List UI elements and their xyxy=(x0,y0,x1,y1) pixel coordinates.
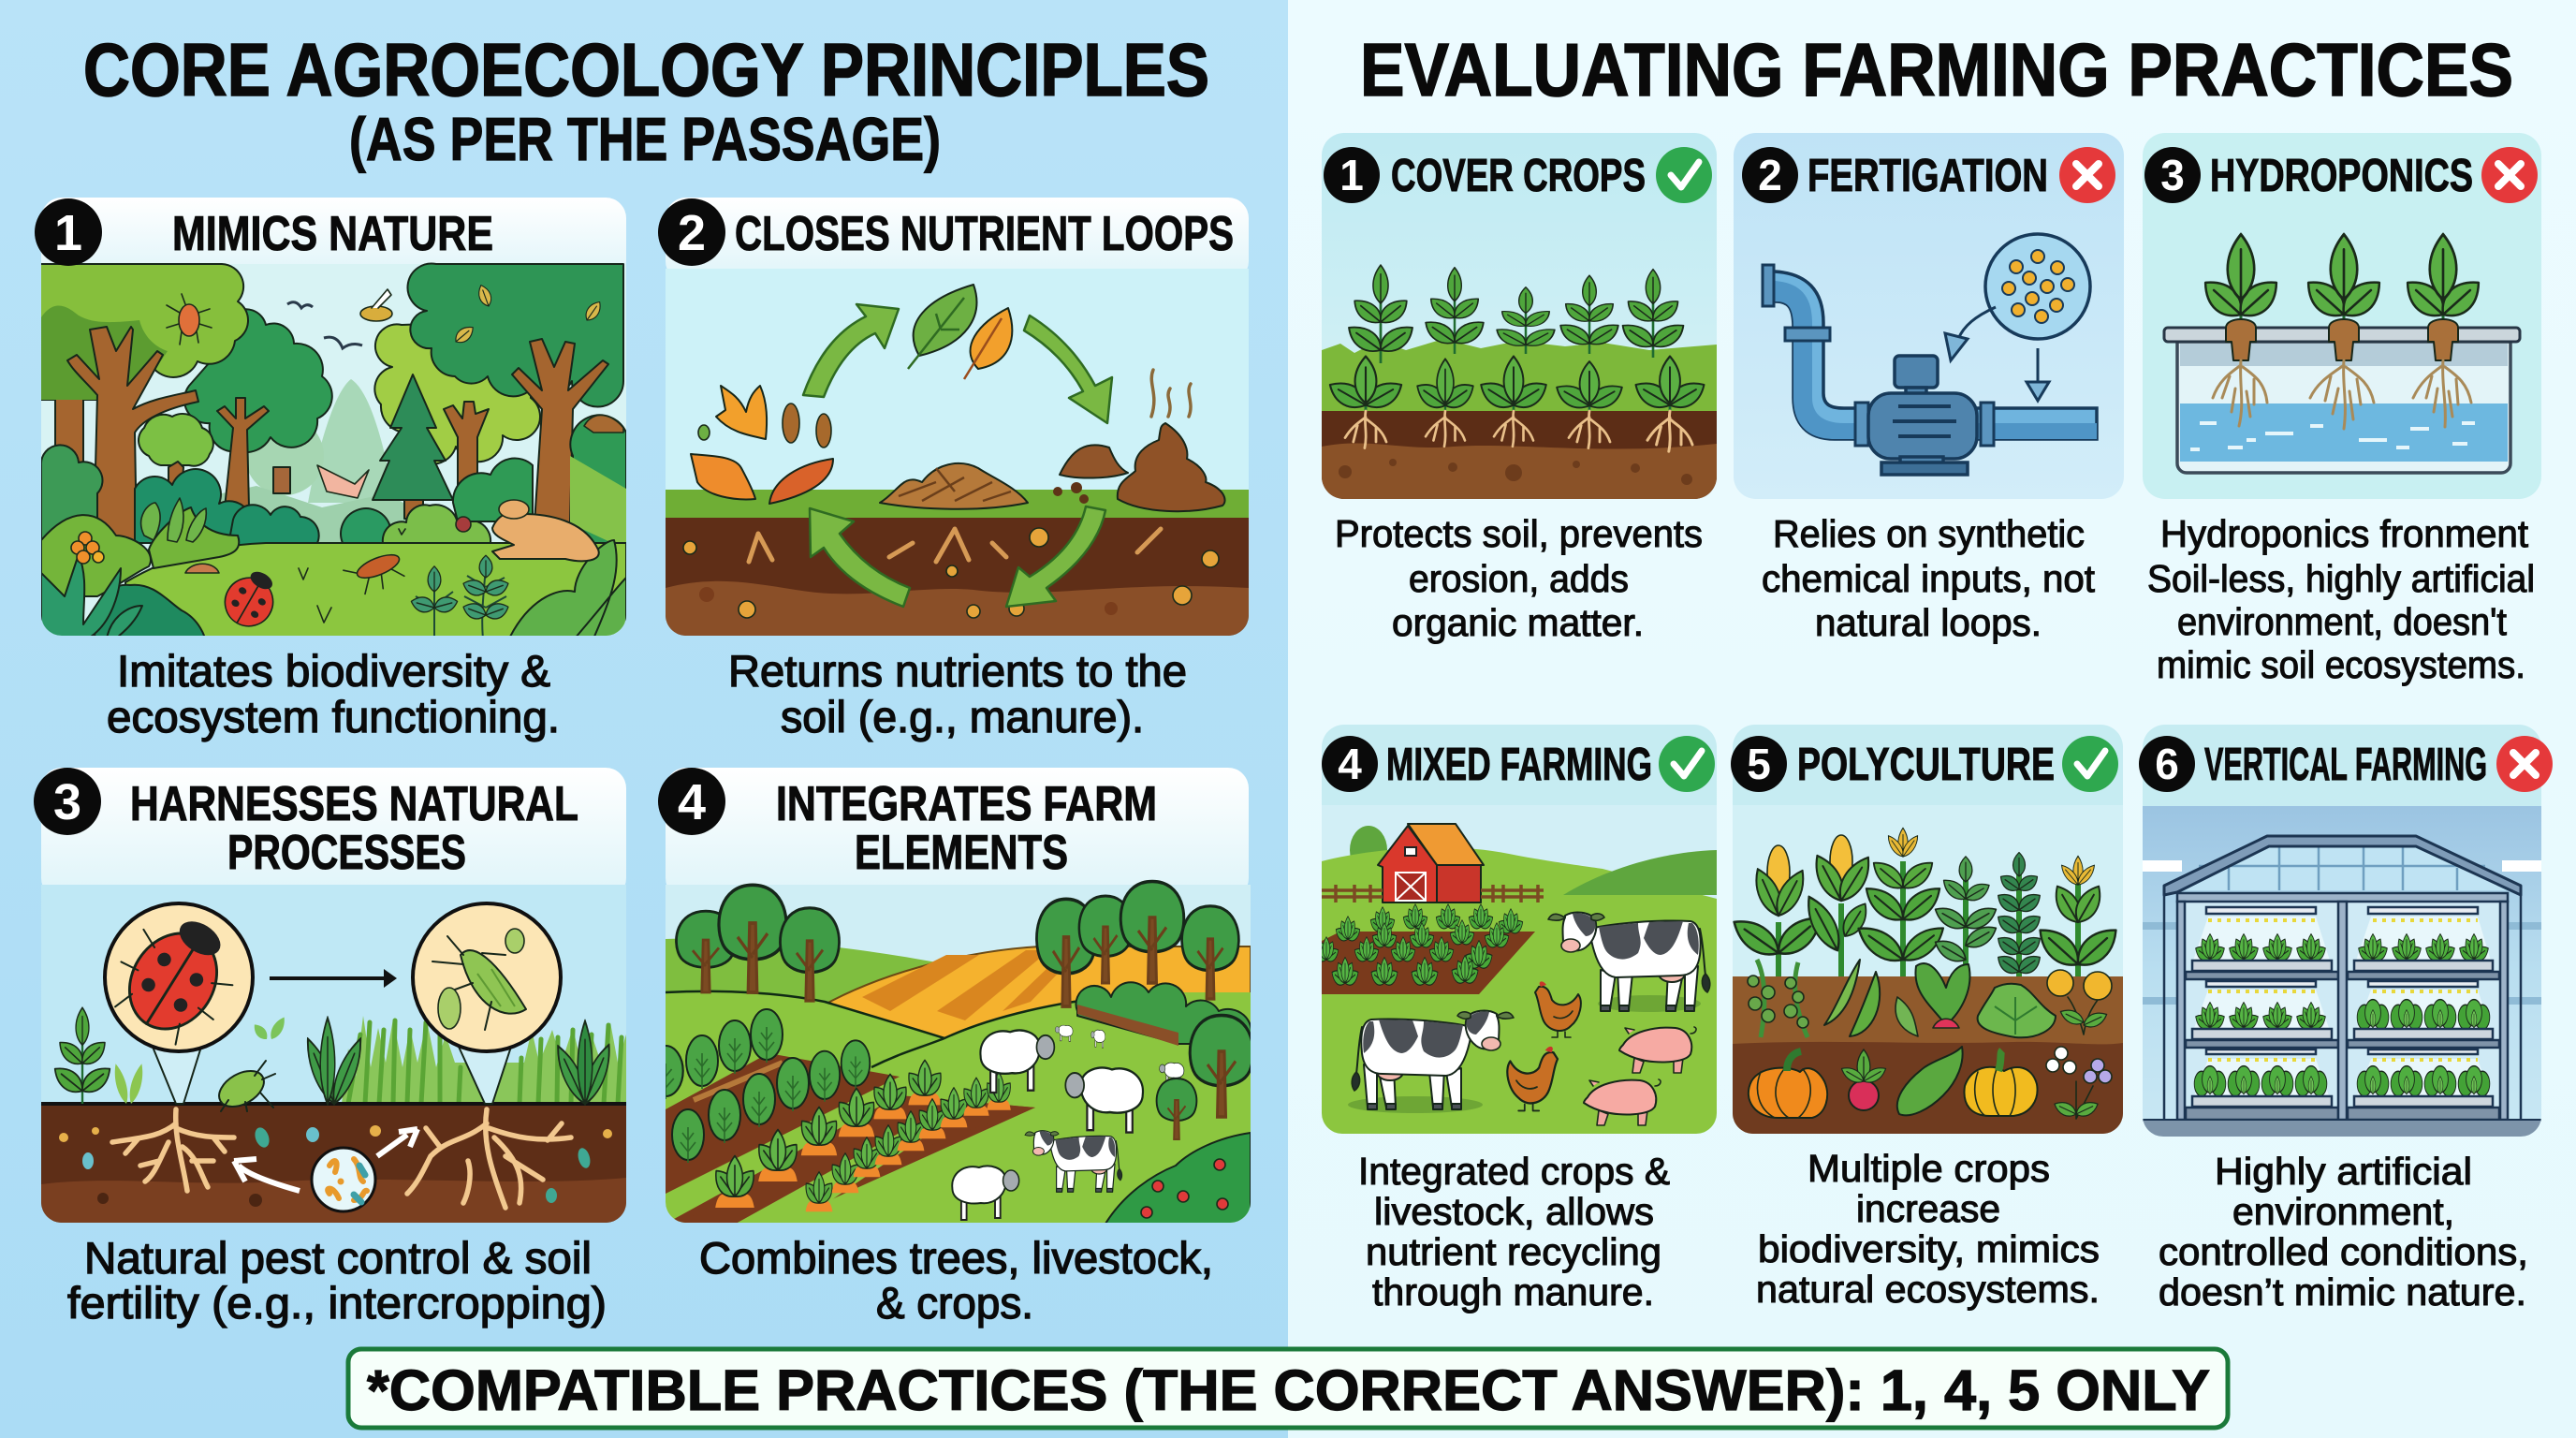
panel: principle 3 harnesses natural processes xyxy=(34,768,626,1223)
caption: hydroponics: Soil-less, highly artificial xyxy=(2147,557,2535,600)
illustration: polyculture garden xyxy=(1727,805,2124,1135)
badge: number 4: 4 xyxy=(1338,740,1362,788)
panel: practice 4 mixed farming xyxy=(1312,725,1717,1135)
orchard rows xyxy=(648,1009,870,1163)
hedge xyxy=(1076,982,1251,1044)
icon: beetle on canopy xyxy=(167,294,212,345)
icon: soil microbes xyxy=(312,1148,375,1211)
icon: red cross xyxy=(2059,147,2115,203)
icon: green and orange leaves xyxy=(908,285,1012,379)
caption: principle 1: ecosystem functioning. xyxy=(107,692,560,741)
caption: fertigation: natural loops. xyxy=(1815,601,2042,644)
root vegetables and gourds xyxy=(1749,1047,2112,1120)
icon: red barn xyxy=(1378,824,1484,902)
caption: principle 2: Returns nutrients to the xyxy=(728,646,1187,696)
grow lights xyxy=(2206,907,2478,1054)
icon: green check xyxy=(1656,147,1712,203)
mid-level vegetables xyxy=(1748,960,2112,1037)
caption: fertigation: Relies on synthetic xyxy=(1773,512,2085,555)
plants with roots xyxy=(2197,234,2487,429)
heading: closes nutrient loops: CLOSES NUTRIENT LOOPS xyxy=(735,207,1234,261)
badge: number 5 xyxy=(1731,736,1787,792)
caption: principle 4: & crops. xyxy=(876,1278,1033,1328)
pipework xyxy=(1763,265,2097,446)
front row plants xyxy=(1325,357,1710,414)
plants xyxy=(50,1007,616,1108)
badge: number 2: 2 xyxy=(678,205,706,261)
right background panel xyxy=(1288,0,2576,1438)
heading: harnesses natural processes xyxy=(130,777,578,880)
icon: aphid on ground xyxy=(212,1061,275,1114)
arrow: nutrients to pump xyxy=(1945,307,1996,360)
icon: green check xyxy=(1659,736,1715,792)
icon: red cross xyxy=(2481,147,2538,203)
vegetable rows xyxy=(710,1060,1014,1211)
soil nutrients and roots xyxy=(683,528,1219,618)
livestock xyxy=(952,1025,1184,1220)
panel: practice 1 cover crops xyxy=(1322,133,1717,499)
badge: number 2: 2 xyxy=(1758,151,1782,199)
arrows: microbes to roots xyxy=(234,1129,417,1191)
arrow: predator to pest xyxy=(270,969,397,988)
frame interior xyxy=(2177,892,2508,1120)
panel: practice 5 polyculture xyxy=(1727,725,2124,1135)
caption: polyculture xyxy=(1756,1147,2100,1311)
caption: principle 2 xyxy=(728,646,1187,741)
illustration: forest ecosystem xyxy=(37,264,626,643)
badge: number 1: 1 xyxy=(54,205,82,261)
caption: mixed farming: livestock, allows xyxy=(1374,1190,1654,1233)
caption: principle 1 xyxy=(107,646,560,741)
badge: number 1 xyxy=(35,198,102,266)
tall crops xyxy=(1727,828,2124,977)
title: core agroecology principles xyxy=(83,28,1209,173)
heading: hydroponics: HYDROPONICS xyxy=(2210,151,2473,201)
caption: fertigation: chemical inputs, not xyxy=(1762,557,2096,600)
badge: number 3 xyxy=(34,768,101,835)
badge: number 6: 6 xyxy=(2155,740,2179,788)
arrow: down to manure xyxy=(1024,315,1112,423)
leafy plants xyxy=(2193,934,2491,1096)
icon: red cross xyxy=(2496,736,2553,792)
heading: fertigation: FERTIGATION xyxy=(1808,151,2048,201)
caption: principle 3: fertility (e.g., intercropping) xyxy=(67,1278,607,1328)
badge: number 3: 3 xyxy=(2160,151,2185,199)
panel: principle 4 integrates farm elements xyxy=(648,768,1253,1224)
badge: number 5: 5 xyxy=(1747,740,1771,788)
vegetable plot xyxy=(1322,932,1535,994)
big left tree xyxy=(37,264,248,540)
caption: cover crops: erosion, adds xyxy=(1409,557,1629,600)
badge: number 1: 1 xyxy=(1339,151,1364,199)
fence xyxy=(1322,885,1544,902)
icon: ground insect xyxy=(343,554,405,595)
caption: principle 1: Imitates biodiversity & xyxy=(117,646,550,696)
icon: magnifier with aphid xyxy=(413,903,561,1104)
caption: cover crops: Protects soil, prevents xyxy=(1335,512,1703,555)
trays and shelves xyxy=(2164,893,2521,1120)
glass roof xyxy=(2177,845,2508,890)
caption: hydroponics: Hydroponics fronment xyxy=(2160,512,2529,555)
caption: vertical farming: Highly artificial xyxy=(2215,1150,2472,1193)
icon: magnifier with ladybird xyxy=(99,898,254,1104)
back row plants xyxy=(1342,265,1690,363)
tall grass xyxy=(342,1016,626,1104)
panel: practice 6 vertical farming xyxy=(2139,725,2553,1138)
left background panel xyxy=(0,0,1288,1438)
illustration: nutrient cycle xyxy=(666,269,1249,636)
caption: mixed farming: nutrient recycling xyxy=(1366,1230,1661,1273)
icon: birds xyxy=(287,302,362,348)
caption: cover crops xyxy=(1335,512,1703,644)
icon: ladybird xyxy=(225,571,273,627)
heading: harnesses natural processes: HARNESSES NATURAL xyxy=(130,777,578,831)
icon: compost pile xyxy=(880,463,1028,509)
caption: hydroponics: environment, doesn't xyxy=(2177,600,2508,643)
panel: principle 1 mimics nature xyxy=(35,198,626,643)
panel: practice 2 fertigation xyxy=(1734,133,2124,499)
tree row on hill xyxy=(676,882,1238,1006)
arrow: up to leaves xyxy=(803,304,899,397)
roots and soil life xyxy=(112,1109,571,1208)
caption: vertical farming: doesn’t mimic nature. xyxy=(2159,1270,2526,1313)
illustration: hydroponic tank xyxy=(2164,234,2520,473)
caption: mixed farming: through manure. xyxy=(1372,1270,1654,1313)
heading: integrates farm elements xyxy=(776,777,1157,880)
icon: green check xyxy=(2062,736,2118,792)
badge: number 3: 3 xyxy=(53,774,81,830)
icon: resting animal xyxy=(492,500,599,561)
heading: mimics nature: MIMICS NATURE xyxy=(172,207,493,261)
pump xyxy=(1868,356,1977,475)
caption: polyculture: biodiversity, mimics xyxy=(1758,1227,2100,1270)
badge: number 2 xyxy=(1742,147,1798,203)
illustration: fertigation pump xyxy=(1763,234,2097,475)
caption: hydroponics: mimic soil ecosystems. xyxy=(2157,643,2525,686)
caption: principle 3 xyxy=(67,1233,607,1328)
caption: vertical farming xyxy=(2159,1150,2528,1313)
soil rows xyxy=(666,1053,1035,1224)
callout: compatible practices answer: *COMPATIBLE PRACTICES (THE CORRECT ANSWER): 1, 4, 5 ONLY xyxy=(367,1358,2210,1422)
badge: number 3 xyxy=(2144,147,2201,203)
livestock group xyxy=(1348,913,1710,1125)
caption: mixed farming xyxy=(1358,1150,1670,1313)
badge: number 4 xyxy=(1322,736,1378,792)
rolling hills xyxy=(666,938,933,1002)
illustration: vertical farm greenhouse xyxy=(2143,806,2541,1138)
heading: integrates farm elements: INTEGRATES FARM xyxy=(776,777,1157,831)
caption: cover crops: organic matter. xyxy=(1392,601,1644,644)
caption: polyculture: Multiple crops xyxy=(1808,1147,2050,1190)
caption: principle 4: Combines trees, livestock, xyxy=(699,1233,1213,1283)
panel: practice 3 hydroponics xyxy=(2143,133,2541,499)
caption: polyculture: natural ecosystems. xyxy=(1756,1268,2100,1311)
illustration: cover crops in soil xyxy=(1322,265,1717,499)
heading: harnesses natural processes: PROCESSES xyxy=(227,826,466,880)
caption: principle 4 xyxy=(699,1233,1213,1328)
illustration: pest control and soil life xyxy=(41,885,626,1223)
roots xyxy=(1345,411,1692,451)
caption: principle 3: Natural pest control & soil xyxy=(84,1233,592,1283)
icon: nutrient granules xyxy=(1985,234,2090,339)
heading: cover crops: COVER CROPS xyxy=(1391,151,1646,201)
caption: principle 2: soil (e.g., manure). xyxy=(781,692,1144,741)
badge: number 4 xyxy=(658,768,725,835)
badge: number 4: 4 xyxy=(678,774,706,830)
arrow: into soil xyxy=(1006,506,1105,607)
caption: polyculture: increase xyxy=(1856,1187,2000,1230)
icon: manure pile xyxy=(1053,370,1225,511)
caption: hydroponics xyxy=(2147,512,2535,686)
title: core agroecology principles: (AS PER THE PASSAGE) xyxy=(349,105,941,173)
badge: number 2 xyxy=(658,198,725,266)
badge: number 6 xyxy=(2139,736,2195,792)
caption: mixed farming: Integrated crops & xyxy=(1358,1150,1670,1193)
caption: fertigation xyxy=(1762,512,2096,644)
caption: vertical farming: environment, xyxy=(2232,1190,2454,1233)
side trees and berry bush xyxy=(1105,1015,1253,1224)
icon: bee xyxy=(360,289,392,321)
arrow: nutrients into line xyxy=(2027,348,2049,401)
arrow: back to leaf litter xyxy=(810,508,910,607)
heading: mixed farming: MIXED FARMING xyxy=(1386,740,1652,790)
title: core agroecology principles: CORE AGROECOLOGY PRINCIPLES xyxy=(83,28,1209,111)
badge: number 1 xyxy=(1324,147,1380,203)
illustration: integrated farm landscape xyxy=(648,882,1253,1224)
panel: principle 2 closes nutrient loops xyxy=(658,198,1249,636)
heading: polyculture: POLYCULTURE xyxy=(1797,740,2055,790)
heading: integrates farm elements: ELEMENTS xyxy=(855,826,1068,880)
caption: vertical farming: controlled conditions, xyxy=(2159,1230,2528,1273)
soil layers xyxy=(1733,976,2123,1135)
illustration: mixed farm xyxy=(1312,805,1717,1135)
icon: fallen autumn leaves xyxy=(691,386,833,504)
